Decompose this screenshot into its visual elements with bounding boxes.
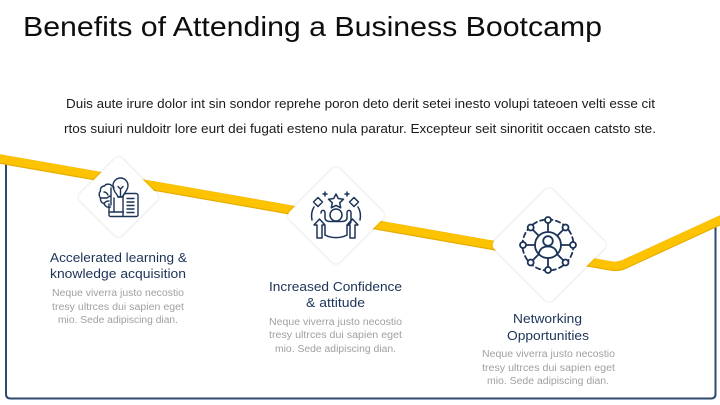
description 3: tresy ultrces dui sapien eget [482, 363, 615, 374]
heading 3: Opportunities [507, 328, 589, 343]
card 1 [50, 155, 187, 326]
heading 2: & attitude [306, 295, 365, 310]
heading 3: Networking [513, 311, 582, 326]
description 2: tresy ultrces dui sapien eget [269, 330, 402, 341]
diamond 2 [286, 165, 386, 266]
heading 1 [50, 250, 187, 281]
description 1: tresy ultrces dui sapien eget [52, 302, 184, 313]
icon: confident group with stars [312, 192, 360, 238]
icon: networking hub [520, 217, 576, 273]
panel frame [6, 163, 716, 398]
description 3 [482, 349, 616, 387]
description 2 [269, 317, 403, 355]
icon: brain and book [99, 178, 138, 216]
description 3: Neque viverra justo necostio [482, 349, 616, 360]
intro paragraph: rtos suiuri nuldoitr lore eurt dei fugati esteno nula paratur. Excepteur seit sinoritit occaen catsto ste. [64, 122, 656, 136]
heading 2: Increased Confidence [269, 279, 402, 294]
yellow ribbon [0, 158, 720, 266]
intro paragraph: Duis aute irure dolor int sin sondor reprehe poron deto derit setei inesto volupi tateoen velti esse cit [66, 97, 656, 111]
title: Benefits of Attending a Business Bootcamp [23, 11, 602, 42]
description 1 [52, 288, 185, 326]
diamond 1 [77, 155, 160, 239]
description 1: mio. Sede adipiscing dian. [58, 315, 178, 326]
card 3 [482, 186, 616, 387]
heading 3 [507, 311, 589, 343]
description 2: mio. Sede adipiscing dian. [275, 344, 396, 355]
description 2: Neque viverra justo necostio [269, 317, 403, 328]
heading 1: Accelerated learning & [50, 250, 187, 265]
description 1: Neque viverra justo necostio [52, 288, 185, 299]
card 2 [269, 165, 403, 355]
diamond 3 [490, 186, 608, 304]
heading 1: knowledge acquisition [50, 266, 186, 281]
description 3: mio. Sede adipiscing dian. [487, 376, 609, 387]
heading 2 [269, 279, 402, 310]
intro paragraph [64, 97, 656, 136]
